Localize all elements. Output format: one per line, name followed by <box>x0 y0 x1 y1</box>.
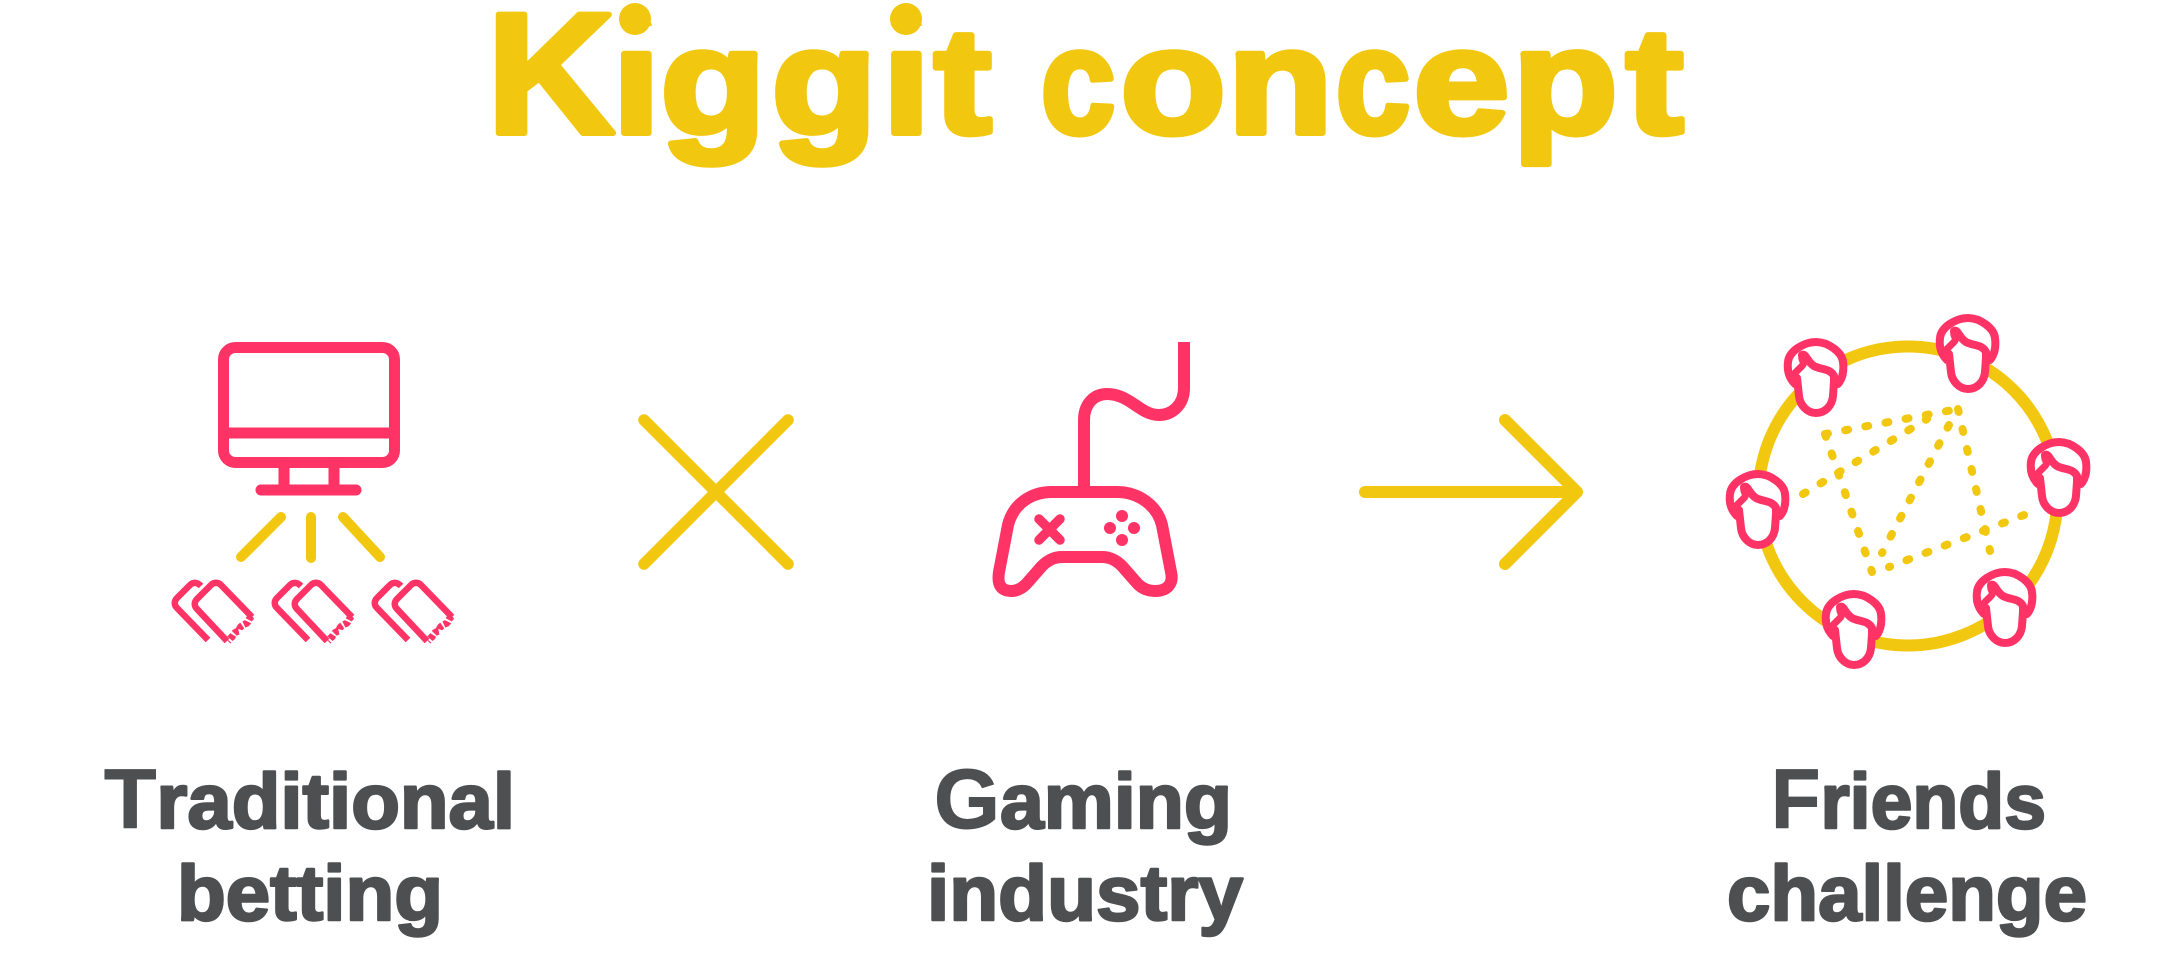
icon: betting tickets <box>175 583 452 641</box>
icon: friends circle <box>1758 346 2058 646</box>
label: friends challenge: Friends <box>1771 752 2046 846</box>
label: gaming industry <box>927 752 1243 937</box>
title: c <box>1336 0 1410 165</box>
label: friends challenge <box>1727 752 2087 937</box>
title: on <box>1120 0 1333 165</box>
title <box>487 0 1683 170</box>
label: friends challenge: challenge <box>1727 849 2087 937</box>
icon: game controller with cable <box>999 342 1184 591</box>
icon: three yellow rays <box>241 517 380 558</box>
icon: multiply sign <box>644 420 788 564</box>
title: c <box>1041 0 1115 165</box>
panel: friends challenge <box>1727 318 2087 937</box>
label: gaming industry: Gaming <box>934 752 1232 846</box>
icon: right arrow <box>1365 420 1577 564</box>
icon: six friends <box>1730 318 2086 665</box>
panel: gaming industry <box>927 342 1243 937</box>
title: iggit <box>612 0 1060 165</box>
title: ept <box>1413 0 1683 165</box>
icon: dotted connections <box>1803 409 2024 572</box>
label: traditional betting: betting <box>177 849 443 937</box>
label: traditional betting: Traditional <box>104 752 515 846</box>
panel: traditional betting <box>104 348 515 937</box>
label: gaming industry: industry <box>927 849 1243 937</box>
label: traditional betting <box>104 752 515 937</box>
icon: desktop monitor <box>224 348 394 490</box>
